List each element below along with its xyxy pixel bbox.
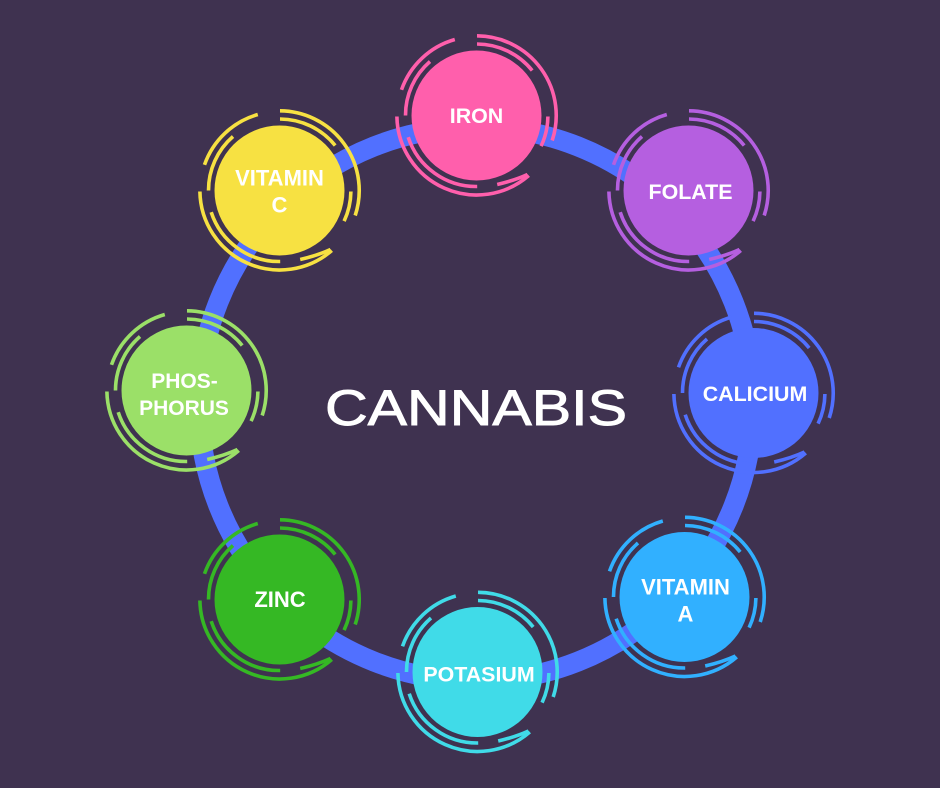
node: phosphorus: PHOS- xyxy=(151,370,218,393)
title: CANNABIS xyxy=(325,380,627,436)
node: vitamin C: VITAMIN xyxy=(235,166,324,190)
node: potassium xyxy=(398,592,557,751)
node: iron xyxy=(397,36,556,195)
node: zinc: ZINC xyxy=(254,587,306,612)
node: iron: IRON xyxy=(450,104,503,128)
node: calcium: CALICIUM xyxy=(703,382,807,406)
node: calcium xyxy=(674,313,833,472)
node: phosphorus: PHORUS xyxy=(139,397,229,420)
node: phosphorus xyxy=(107,311,266,470)
node: zinc xyxy=(200,520,359,679)
node: vitamin C: C xyxy=(272,192,288,218)
node: vitamin C xyxy=(200,111,359,270)
node: potassium: POTASIUM xyxy=(423,662,535,686)
connecting ring xyxy=(199,127,753,681)
node: vitamin A xyxy=(605,517,764,676)
node: vitamin A: A xyxy=(678,602,694,626)
node: folate xyxy=(609,111,768,270)
node: vitamin A: VITAMIN xyxy=(641,574,730,600)
node: folate: FOLATE xyxy=(649,180,732,204)
